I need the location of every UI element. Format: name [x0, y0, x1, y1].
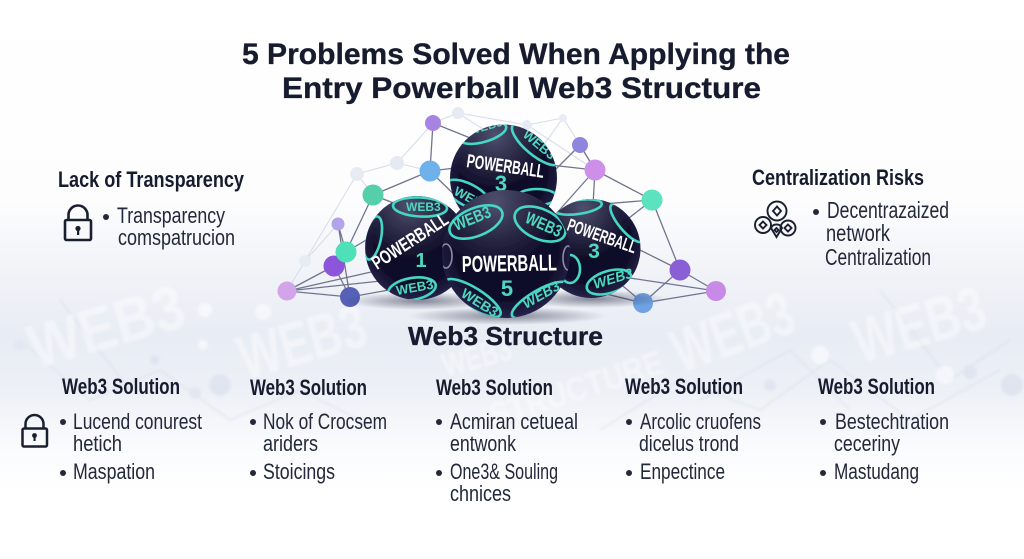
- powerball 3 back: WEB3: [452, 183, 492, 214]
- icon: padlock, first solution: [22, 415, 47, 446]
- title: 5 Problems Solved When Applying the: [242, 38, 790, 71]
- powerball 5 front: WEB3: [520, 277, 563, 312]
- powerball 3 back: POWERBALL: [465, 151, 546, 183]
- solution column 4: Enpectince: [640, 459, 725, 484]
- diagram label: Web3 Structure: Web3 Structure: [408, 321, 603, 351]
- powerball 3 back: WEB3: [467, 115, 504, 138]
- powerball 3 right: 3: [588, 240, 600, 263]
- solution column 3: One3& Souling: [450, 459, 558, 484]
- solution column 2: Stoicings: [263, 459, 335, 484]
- solution column 4: Arcolic cruofens: [640, 409, 761, 434]
- powerball 3 back: [450, 124, 557, 210]
- faint network links: [287, 113, 595, 291]
- title: Entry Powerball Web3 Structure: [282, 72, 761, 105]
- ball shadows: [345, 290, 667, 325]
- watermark WEB3 text: WEB3: [20, 272, 193, 383]
- central illustration: powerballs and network: [278, 107, 726, 325]
- solution column 3: [436, 375, 578, 506]
- powerball 5 front: POWERBALL: [462, 249, 557, 277]
- solution column 1: Lucend conurest: [73, 409, 202, 434]
- solution column 5: Bestechtration: [835, 409, 949, 434]
- bullet text: Transparency: [117, 203, 225, 228]
- bullet text: [103, 203, 235, 250]
- solution column 1: Maspation: [73, 459, 155, 484]
- powerball 5 front: 5: [501, 276, 513, 301]
- panel: lack of transparency: [58, 167, 245, 250]
- solution column 5: [818, 374, 949, 484]
- powerball 1: POWERBALL: [368, 209, 453, 274]
- solution column 1: hetich: [73, 431, 122, 456]
- solution column 3: chnices: [450, 481, 511, 506]
- solution column 2: Web3 Solution: [250, 375, 367, 400]
- powerball 5 front: WEB3: [522, 208, 565, 241]
- solution column 2: [250, 375, 387, 484]
- powerball 3 back: WEB3: [520, 127, 558, 162]
- solution column 1: Web3 Solution: [62, 374, 180, 399]
- bullet text: Centralization: [825, 244, 931, 270]
- powerball 1: [365, 196, 456, 300]
- bullet text: network: [826, 220, 890, 246]
- watermark WEB3 text: WEB3: [230, 291, 374, 393]
- heading: Centralization Risks: [752, 165, 924, 190]
- solution column 4: Web3 Solution: [625, 374, 743, 399]
- powerball 1: WEB3: [395, 277, 435, 298]
- watermark WEB3 text: WEB3: [662, 279, 804, 387]
- solution column 5: Web3 Solution: [818, 374, 935, 399]
- solution column 4: [625, 374, 761, 484]
- powerball 3 right: WEB3: [591, 265, 635, 292]
- watermark WEB3 text: [20, 272, 994, 435]
- solution column 5: ceceriny: [834, 431, 900, 456]
- solution column 3: entwonk: [450, 431, 517, 456]
- icon: padlock: [65, 206, 91, 240]
- panel: centralization risks: [752, 165, 949, 270]
- powerball 1: WEB3: [406, 200, 441, 214]
- bullet text: Decentrazaized: [827, 197, 949, 223]
- watermark WEB3 text: STRUCTURE: [485, 344, 668, 435]
- powerball 5 front: WEB3: [450, 202, 494, 235]
- solution column 1: [60, 374, 202, 484]
- faint background network: [14, 290, 1023, 430]
- watermark WEB3 text: WEB3: [438, 330, 516, 385]
- heading: Lack of Transparency: [58, 167, 245, 192]
- solution column 3: Acmiran cetueal: [450, 409, 578, 434]
- bullet text: [813, 197, 949, 270]
- powerball 3 right: POWERBALL: [565, 215, 639, 257]
- powerball 3 right: [556, 199, 640, 298]
- network links: [287, 123, 716, 303]
- powerball 3 back: 3: [495, 171, 507, 196]
- solution column 5: Mastudang: [834, 459, 919, 484]
- icon: decentralized nodes: [755, 202, 796, 237]
- solution column 4: dicelus trond: [639, 431, 739, 456]
- solution column 2: Nok of Crocsem: [263, 409, 387, 434]
- powerball 5 front: WEB3: [458, 285, 501, 320]
- solution column 3: Web3 Solution: [436, 375, 553, 400]
- bullet text: comspatrucion: [118, 225, 235, 250]
- powerball 1: 1: [415, 250, 427, 272]
- solution column 2: ariders: [263, 431, 318, 456]
- powerball 5 front: [440, 190, 573, 325]
- network nodes: [278, 107, 726, 313]
- title: [242, 38, 790, 105]
